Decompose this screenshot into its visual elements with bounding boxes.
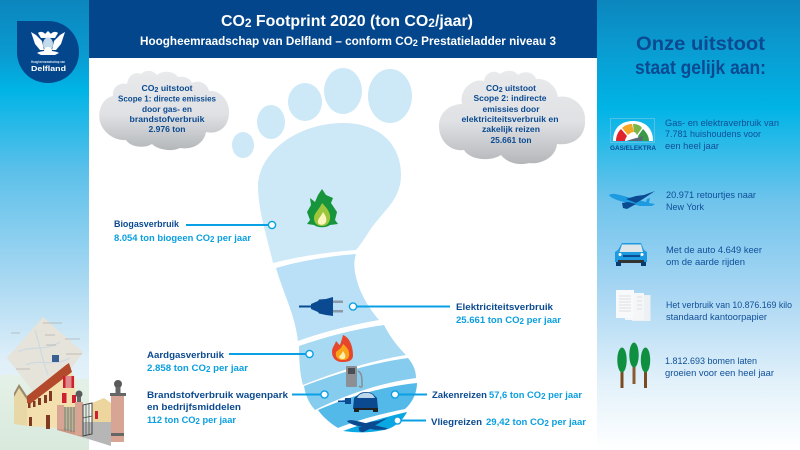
panel: left background xyxy=(0,0,89,450)
icon: green flame xyxy=(307,189,338,227)
callout: natural gas: per jaar xyxy=(210,363,248,374)
callout: fuel: Brandstofverbruik wagenpark xyxy=(147,390,289,401)
text: scope 2: Scope 2: indirecte xyxy=(474,93,547,103)
grey wall xyxy=(82,422,111,446)
subtitle: Prestatieladder niveau 3 xyxy=(418,36,556,48)
callout: fuel: 112 ton CO xyxy=(147,415,197,426)
icon: car xyxy=(615,243,647,266)
icon: plane xyxy=(609,191,655,209)
foot segment: business travel xyxy=(318,383,417,428)
heading: right panel xyxy=(635,34,766,79)
callout: electricity: Elektriciteitsverbruik xyxy=(456,302,554,313)
text: scope 1 xyxy=(118,83,216,134)
title: Footprint 2020 (ton CO xyxy=(252,13,428,30)
callout: electricity xyxy=(349,302,561,326)
callout: flights: per jaar xyxy=(549,417,586,428)
logo small text: Hoogheemraadschap van xyxy=(31,60,65,64)
text: scope 1: CO xyxy=(142,83,154,93)
text: households: Gas- en elektraverbruik van xyxy=(665,118,779,129)
callout: business travel: 2 xyxy=(541,392,546,401)
icon: trees xyxy=(617,342,650,388)
illustration: buildings and gate xyxy=(14,363,126,446)
text: scope 1: uitstoot xyxy=(158,83,193,93)
callout: flights: Vliegreizen xyxy=(431,417,482,428)
logo: Delfland xyxy=(17,21,79,83)
text: paper: standaard kantoorpapier xyxy=(666,312,767,323)
callout: natural gas: 2.858 ton CO xyxy=(147,363,205,374)
subtitle: Hoogheemraadschap van Delfland – conform CO xyxy=(140,36,408,48)
foot segment: biogas xyxy=(258,123,401,263)
large pillar xyxy=(111,396,124,442)
icon: plane in foot xyxy=(347,418,388,432)
text: scope 2: zakelijk reizen xyxy=(482,124,540,134)
foot segment: electricity xyxy=(276,254,379,341)
text: scope 1: brandstofverbruik xyxy=(130,114,205,124)
panel: footprint xyxy=(232,68,417,432)
callout: natural gas: 2 xyxy=(206,365,211,374)
cloud: scope 2 xyxy=(439,71,585,164)
foot segment: fuel xyxy=(304,358,416,410)
pillars xyxy=(57,405,64,429)
text: scope 2 xyxy=(462,83,558,145)
text: trees: groeien voor een heel jaar xyxy=(665,368,774,379)
text: households: 7.781 huishoudens voor xyxy=(665,129,761,140)
text: paper xyxy=(666,300,792,323)
callout: electricity: 2 xyxy=(519,317,525,326)
icon: gas gauge xyxy=(610,118,657,152)
main house xyxy=(27,368,75,429)
callout: electricity: per jaar xyxy=(524,315,561,326)
subtitle: 2 xyxy=(413,38,418,48)
foot segment: natural gas xyxy=(299,325,406,385)
icon: crest xyxy=(31,31,65,55)
callout: biogas: 8.054 ton biogeen CO xyxy=(114,233,211,244)
callout: fuel: 2 xyxy=(196,417,200,426)
callout: natural gas xyxy=(147,350,313,374)
text: car: Met de auto 4.649 keer xyxy=(666,245,762,256)
text: households: een heel jaar xyxy=(665,141,719,152)
panel: right background xyxy=(597,0,800,450)
back house xyxy=(92,398,111,424)
cloud: scope 1 xyxy=(99,71,229,150)
text: scope 1: Scope 1: directe emissies xyxy=(118,94,216,104)
callout: biogas: Biogasverbruik xyxy=(114,219,180,230)
callout: fuel xyxy=(147,390,328,426)
callout: business travel: 57,6 ton CO xyxy=(489,390,542,401)
callout: flights: 29,42 ton CO xyxy=(486,417,544,428)
callout: biogas xyxy=(114,219,276,244)
title: /jaar) xyxy=(435,13,473,30)
icon: plug xyxy=(299,297,343,316)
icon: electric car xyxy=(338,392,378,412)
text: trees: 1.812.693 bomen laten xyxy=(665,356,757,367)
left gabled house xyxy=(14,384,27,426)
callout: business travel xyxy=(391,390,582,401)
text: trees xyxy=(665,356,774,379)
callout: fuel: per jaar xyxy=(200,415,236,426)
callout: fuel: en bedrijfsmiddelen xyxy=(147,402,241,413)
heading: right panel: staat gelijk aan: xyxy=(635,58,766,79)
text: flights: New York xyxy=(666,202,704,213)
illustration: map xyxy=(7,317,83,395)
title: 2 xyxy=(428,16,435,30)
callout: flights xyxy=(394,417,586,428)
gauge label: GAS/ELEKTRA xyxy=(610,145,657,152)
text: scope 2: uitstoot xyxy=(503,83,536,93)
callout: electricity: 25.661 ton CO xyxy=(456,315,519,326)
gate wall xyxy=(57,426,82,437)
logo name: Delfland xyxy=(31,64,66,73)
toes xyxy=(232,68,412,158)
text: scope 2: elektriciteitsverbruik en xyxy=(462,114,558,124)
text: flights: 20.971 retourtjes naar xyxy=(666,190,756,201)
callout: natural gas: Aardgasverbruik xyxy=(147,350,225,361)
text: scope 2: emissies door xyxy=(482,104,540,114)
callout: business travel: per jaar xyxy=(546,390,582,401)
text: scope 1: 2 xyxy=(154,87,159,94)
text: flights xyxy=(666,190,756,213)
callout: business travel: Zakenreizen xyxy=(432,390,487,401)
title: CO xyxy=(221,13,245,30)
text: scope 2: 2 xyxy=(499,87,503,94)
text: scope 1: 2.976 ton xyxy=(148,124,186,134)
title: 2 xyxy=(245,16,252,30)
icon: orange flame xyxy=(332,335,353,362)
text: car: om de aarde rijden xyxy=(666,257,745,268)
text: scope 2: 25.661 ton xyxy=(490,135,532,145)
callout: biogas: 2 xyxy=(210,235,215,244)
text: scope 1: door gas- en xyxy=(142,104,192,114)
icon: fuel pump xyxy=(346,366,362,387)
callout: flights: 2 xyxy=(544,419,549,428)
text: car xyxy=(666,245,762,268)
iron gate xyxy=(83,403,92,436)
text: paper: Het verbruik van 10.876.169 kilo xyxy=(666,300,792,311)
text: households xyxy=(665,118,779,152)
header banner xyxy=(89,0,597,58)
icon: paper xyxy=(616,290,650,321)
callout: biogas: per jaar xyxy=(214,233,251,244)
text: scope 2: CO xyxy=(486,83,499,93)
foot segment: flights xyxy=(343,412,407,432)
heading: right panel: Onze uitstoot xyxy=(636,34,766,55)
